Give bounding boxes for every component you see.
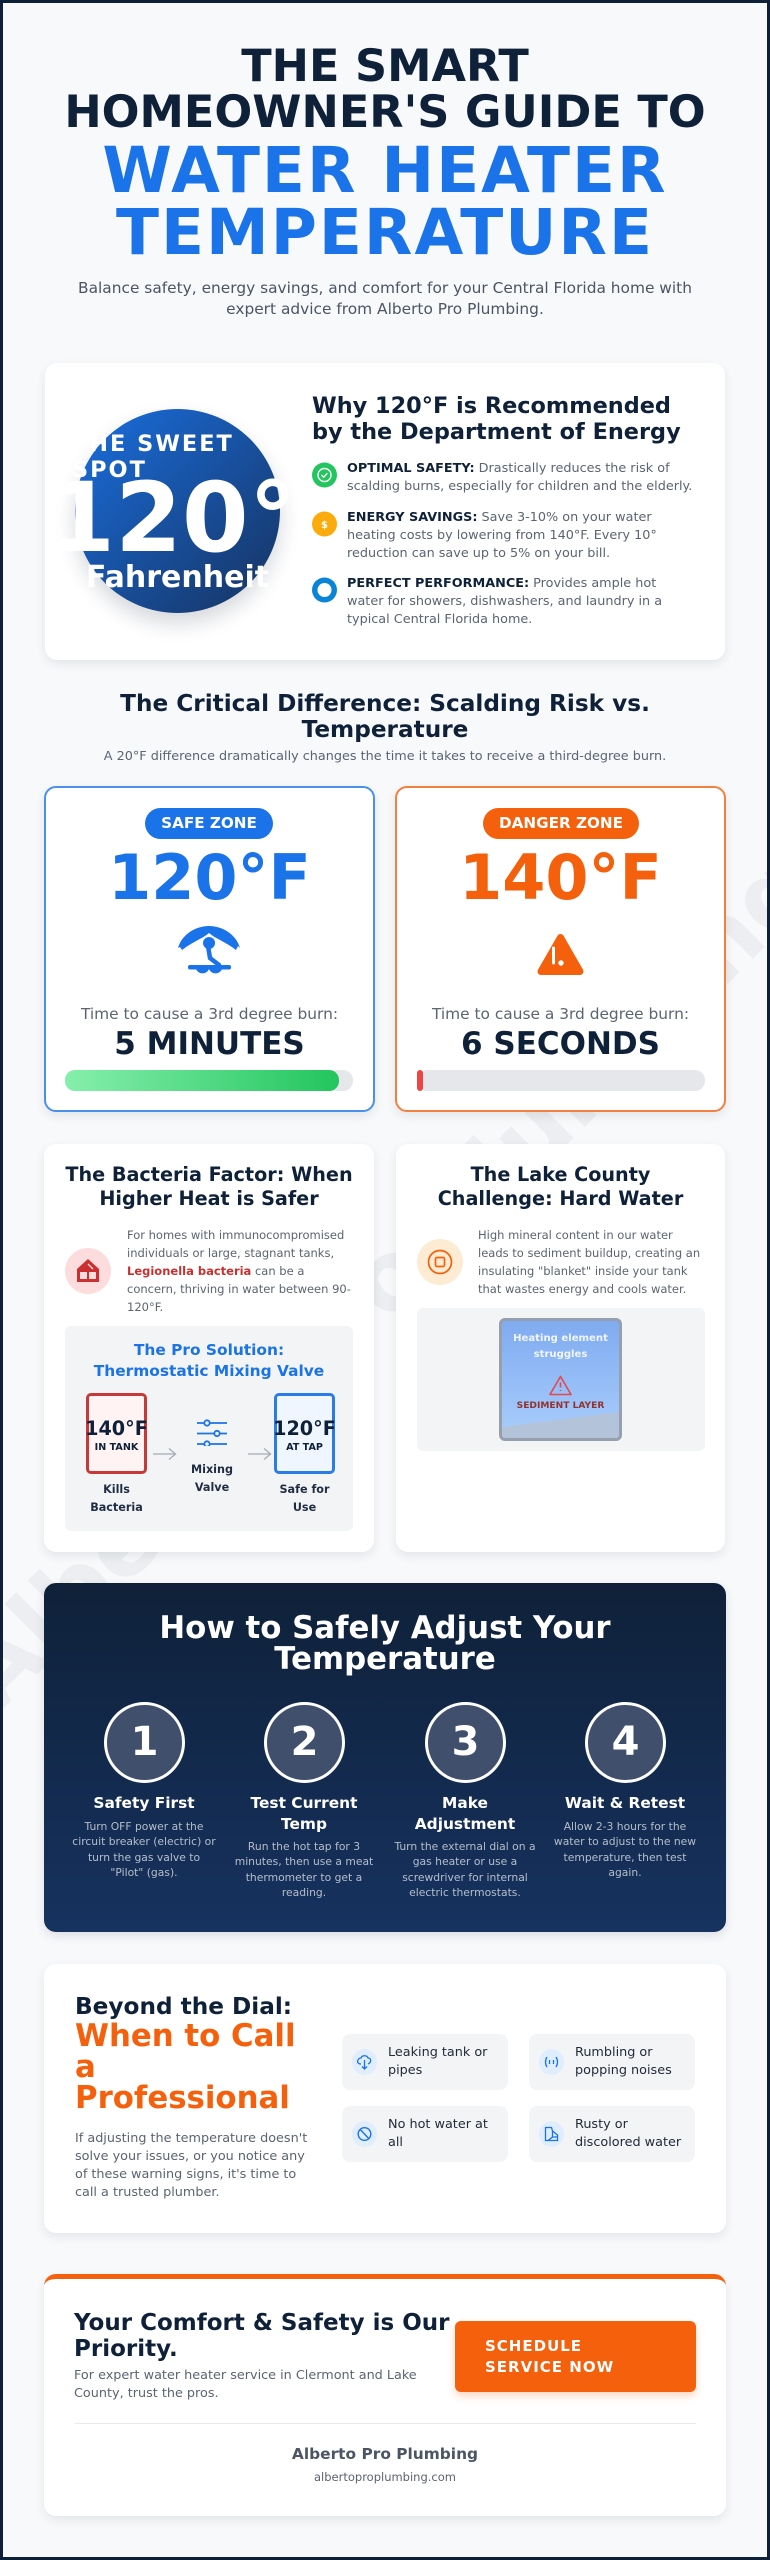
- body text: of these warning signs, it's time to: [75, 2167, 296, 2182]
- body text: call a trusted plumber.: [75, 2185, 220, 2200]
- step text: Allow 2-3 hours for the: [564, 1820, 686, 1833]
- label: popping noises: [575, 2063, 672, 2078]
- body text: County, trust the pros.: [74, 2386, 219, 2401]
- heading: The Pro Solution:: [134, 1341, 284, 1359]
- icon: dollar: [312, 512, 337, 536]
- heading: Your Comfort & Safety is Our: [74, 2310, 449, 2336]
- step text: Run the hot tap for 3: [248, 1840, 360, 1853]
- pill: SAFE ZONE: [161, 814, 257, 832]
- body text: Legionella bacteria can be a: [127, 1264, 304, 1278]
- heading: Beyond the Dial:: [75, 1993, 292, 2020]
- text: heating costs by lowering from 140°F. Every 10°: [347, 528, 657, 543]
- button label: SCHEDULE: [485, 2337, 582, 2355]
- icon: discolored: [539, 2121, 564, 2147]
- highlighted heading: [75, 2021, 296, 2114]
- number: [585, 1702, 666, 1783]
- label: safe for use: [279, 1483, 330, 1514]
- badge label: [72, 431, 234, 483]
- button label: [485, 2336, 614, 2377]
- heading: [312, 393, 681, 445]
- burn time: 5 MINUTES: [114, 1026, 305, 1062]
- text: typical Central Florida home.: [347, 612, 532, 627]
- body text: [74, 2367, 417, 2403]
- brand name: Alberto Pro Plumbing: [292, 2445, 478, 2463]
- step title: Test Current: [251, 1794, 357, 1812]
- pill: DANGER ZONE: [499, 814, 623, 832]
- badge label: THE SWEET: [72, 431, 234, 457]
- benefit: optimal safety: [312, 461, 692, 494]
- label: Leaking tank or: [388, 2045, 487, 2060]
- heading: [94, 1341, 324, 1380]
- step 2: [235, 1702, 373, 1899]
- icon: dollar: $: [321, 520, 328, 531]
- label: IN TANK: [95, 1442, 138, 1453]
- body text: solve your issues, or you notice any: [75, 2149, 305, 2164]
- progress bar: [417, 1070, 705, 1091]
- panel: lake county: [396, 1144, 725, 1552]
- number: 1: [131, 1719, 158, 1765]
- pro solution box: [65, 1326, 353, 1531]
- burn label: Time to cause a 3rd degree burn:: [432, 1005, 689, 1023]
- panel: why 120F: [45, 363, 725, 660]
- body text: For homes with immunocompromised: [127, 1228, 344, 1242]
- element text: Heating element: [513, 1333, 608, 1344]
- divider: [74, 2423, 696, 2424]
- sediment label: SEDIMENT LAYER: [517, 1401, 604, 1411]
- label: all: [388, 2135, 403, 2150]
- subtitle: Balance safety, energy savings, and comfort for your Central Florida home with: [78, 279, 692, 297]
- body text: insulating "blanket" inside your tank: [478, 1264, 688, 1278]
- heading: Thermostatic Mixing Valve: [94, 1362, 324, 1380]
- heading: Challenge: Hard Water: [438, 1187, 683, 1210]
- panel: when to call: [44, 1964, 726, 2233]
- step text: electric thermostats.: [409, 1886, 521, 1899]
- heading: Priority.: [74, 2336, 178, 2362]
- step text: minutes, then use a meat: [235, 1855, 373, 1868]
- body text: High mineral content in our water: [478, 1228, 673, 1242]
- panel: danger zone: [395, 786, 726, 1112]
- temp: 140°F: [85, 1417, 148, 1440]
- arrow: [153, 1448, 176, 1460]
- section heading: critical difference: The Critical Difference: Scalding Risk vs.: [120, 690, 650, 717]
- sign: leaking: [342, 2034, 508, 2090]
- step title: Safety First: [93, 1794, 195, 1812]
- label: [388, 2116, 488, 2152]
- label: safe for use: Use: [293, 1501, 316, 1514]
- body text: leads to sediment buildup, creating an: [478, 1246, 700, 1260]
- bar fill: [417, 1070, 423, 1091]
- icon: house: [65, 1248, 111, 1294]
- number: [425, 1702, 506, 1783]
- title line: smart homeowner's guide: [64, 40, 706, 138]
- section subheading: A 20°F difference dramatically changes the time it takes to receive a third-degree burn.: [104, 749, 666, 764]
- number: [264, 1702, 345, 1783]
- body text: [75, 2130, 307, 2202]
- number: 3: [452, 1719, 479, 1765]
- body text: concern, thriving in water between 90-: [127, 1282, 351, 1296]
- label: AT TAP: [286, 1442, 323, 1453]
- badge unit: Fahrenheit: [86, 560, 269, 595]
- icon: shield shower: [178, 926, 240, 974]
- label: [388, 2044, 487, 2080]
- step text: Turn the external dial on a: [394, 1840, 536, 1853]
- icon: prohibited: [352, 2121, 377, 2147]
- heading: by the Department of Energy: [312, 419, 681, 445]
- heading: Why 120°F is Recommended: [312, 393, 671, 419]
- step text: circuit breaker (electric) or: [72, 1835, 216, 1848]
- label: kills bacteria: [90, 1483, 143, 1514]
- title line: smart homeowner's guide: HOMEOWNER'S GUIDE TO: [64, 86, 706, 138]
- badge label: SPOT: [72, 457, 147, 483]
- body text: If adjusting the temperature doesn't: [75, 2131, 307, 2146]
- label: Rusty or: [575, 2117, 628, 2132]
- body text: [478, 1228, 700, 1296]
- sign: rusty: [529, 2106, 695, 2162]
- step text: again.: [608, 1866, 642, 1879]
- title line: water heater temperature: [102, 134, 668, 269]
- label: kills bacteria: Kills: [103, 1483, 130, 1496]
- text: OPTIMAL SAFETY: Drastically reduces the risk of: [347, 461, 670, 476]
- step text: [72, 1820, 216, 1879]
- text: [347, 510, 657, 561]
- step text: turn the gas valve to: [88, 1851, 200, 1864]
- button label: SERVICE NOW: [485, 2358, 614, 2376]
- temp: 120°F: [273, 1417, 336, 1440]
- number: 2: [291, 1719, 318, 1765]
- bar fill: [65, 1070, 339, 1091]
- title: [64, 40, 706, 269]
- text: PERFECT PERFORMANCE: Provides ample hot: [347, 576, 656, 591]
- benefit: perfect performance: [312, 576, 662, 627]
- icon: mixing valve: [197, 1419, 227, 1446]
- sweet spot badge: [48, 409, 297, 631]
- label: mixing valve: Valve: [195, 1481, 229, 1494]
- step title: [385, 1793, 545, 1835]
- step 1: [72, 1702, 216, 1879]
- title line: smart homeowner's guide: THE SMART: [241, 40, 529, 92]
- sediment layer: [502, 1412, 619, 1438]
- text: reduction can save up to 5% on your bill.: [347, 546, 610, 561]
- step title: Adjustment: [415, 1815, 515, 1833]
- heading: The Bacteria Factor: When: [65, 1163, 353, 1186]
- temperature: 120°F: [108, 841, 311, 914]
- step text: reading.: [282, 1886, 326, 1899]
- body text: individuals or large, stagnant tanks,: [127, 1246, 334, 1260]
- step title: Wait & Retest: [565, 1794, 685, 1812]
- icon: warning: [538, 934, 584, 975]
- heading: [438, 1163, 684, 1210]
- subtitle: expert advice from Alberto Pro Plumbing.: [226, 300, 544, 318]
- label: kills bacteria: Bacteria: [90, 1501, 143, 1514]
- title line: water heater temperature: WATER HEATER: [102, 134, 668, 207]
- badge circle: [75, 409, 280, 613]
- label: discolored water: [575, 2135, 681, 2150]
- arrow: [248, 1448, 272, 1460]
- icon: warning outline: [549, 1376, 572, 1396]
- label: [575, 2116, 681, 2152]
- step text: [545, 1819, 705, 1881]
- label: Rumbling or: [575, 2045, 653, 2060]
- number: [104, 1702, 185, 1783]
- heading: [74, 2310, 449, 2362]
- highlighted heading: Professional: [75, 2080, 290, 2116]
- button: [455, 2321, 696, 2392]
- burn time: 6 SECONDS: [461, 1026, 660, 1062]
- label: mixing valve: Mixing: [191, 1463, 233, 1476]
- subtitle: [78, 279, 692, 318]
- heading: Higher Heat is Safer: [99, 1187, 319, 1210]
- label: safe for use: Safe for: [279, 1483, 330, 1496]
- body text: [127, 1228, 351, 1314]
- title line: water heater temperature: TEMPERATURE: [116, 196, 654, 269]
- icon: check: [312, 462, 337, 488]
- tap box 120: [274, 1393, 335, 1474]
- website: albertoproplumbing.com: [314, 2470, 456, 2484]
- icon: noise: [539, 2049, 564, 2075]
- tank: [499, 1318, 622, 1441]
- heading: Temperature: [274, 1641, 496, 1677]
- text: ENERGY SAVINGS: Save 3-10% on your water: [347, 510, 652, 525]
- tank diagram box: [417, 1308, 705, 1451]
- panel: safe zone: [44, 786, 375, 1112]
- step text: thermometer to get a: [246, 1871, 362, 1884]
- body text: For expert water heater service in Clermont and Lake: [74, 2368, 417, 2383]
- icon: sediment: [417, 1239, 463, 1285]
- icon: leak: [352, 2049, 377, 2075]
- element text: [513, 1333, 608, 1360]
- label: mixing valve: [191, 1463, 233, 1494]
- step title: Make: [442, 1794, 488, 1812]
- heading: The Lake County: [471, 1163, 650, 1186]
- body text: 120°F.: [127, 1300, 163, 1314]
- step text: [385, 1839, 545, 1901]
- panel: bacteria factor: [44, 1144, 374, 1552]
- text: scalding burns, especially for children and the elderly.: [347, 479, 692, 494]
- sign: no hot water: [342, 2106, 508, 2162]
- text: [347, 576, 662, 627]
- heading: [159, 1610, 611, 1677]
- benefit: energy savings: [312, 510, 657, 561]
- pill: [483, 808, 639, 839]
- step title: Temp: [281, 1815, 327, 1833]
- step 4: [545, 1702, 705, 1882]
- label: [575, 2044, 672, 2080]
- label: pipes: [388, 2063, 422, 2078]
- label: No hot water at: [388, 2117, 488, 2132]
- heading: [65, 1163, 353, 1210]
- badge temperature: 120°: [48, 462, 297, 574]
- pill: [145, 808, 273, 839]
- step text: [224, 1839, 384, 1901]
- temperature: 140°F: [459, 841, 662, 914]
- step text: temperature, then test: [564, 1851, 686, 1864]
- step text: gas heater or use a: [413, 1855, 517, 1868]
- icon: ring: [312, 578, 337, 602]
- sign: rumbling: [529, 2034, 695, 2090]
- step text: Turn OFF power at the: [85, 1820, 203, 1833]
- section heading: critical difference: Temperature: [302, 716, 468, 743]
- step text: "Pilot" (gas).: [110, 1866, 178, 1879]
- tank box 140: [86, 1393, 147, 1474]
- section heading: critical difference: [120, 690, 650, 743]
- step text: water to adjust to the new: [554, 1835, 696, 1848]
- heading: How to Safely Adjust Your: [159, 1610, 611, 1646]
- panel: how to adjust: [44, 1583, 726, 1932]
- burn label: Time to cause a 3rd degree burn:: [81, 1005, 338, 1023]
- step 3: [385, 1702, 545, 1902]
- step title: [250, 1794, 358, 1833]
- step text: screwdriver for internal: [402, 1871, 528, 1884]
- highlighted heading: a: [75, 2049, 96, 2085]
- number: 4: [612, 1719, 639, 1765]
- text: water for showers, dishwashers, and laundry in a: [347, 594, 662, 609]
- highlighted heading: When to Call: [75, 2018, 296, 2054]
- text: [347, 461, 692, 494]
- element text: struggles: [534, 1349, 587, 1360]
- progress bar: [65, 1070, 353, 1091]
- body text: that wastes energy and cools water.: [478, 1282, 686, 1296]
- panel: call to action: [44, 2274, 726, 2516]
